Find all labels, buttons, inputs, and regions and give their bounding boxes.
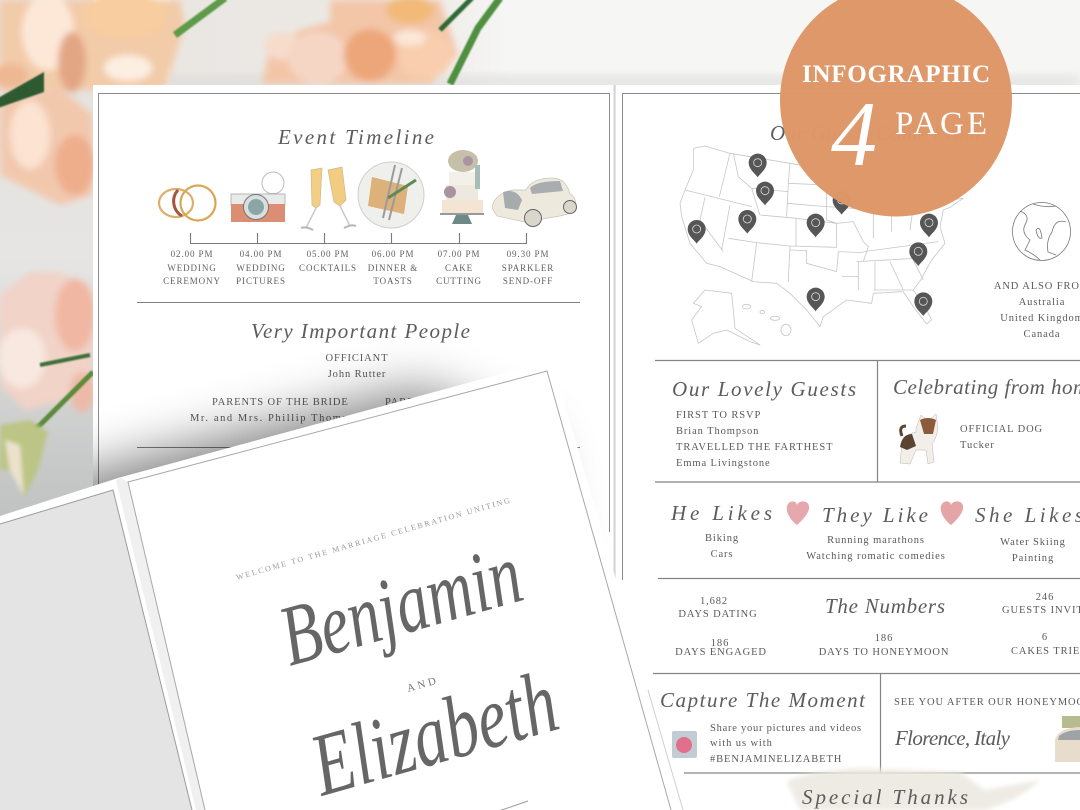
timeline labels: DINNER & — [368, 263, 418, 273]
name: Benjamin: Benjamin — [269, 526, 532, 685]
officiant text: John Rutter — [328, 369, 386, 380]
timeline labels: WEDDING — [236, 263, 286, 273]
card inner border — [128, 371, 671, 810]
heading: Very Important People: Very Important People — [251, 319, 470, 343]
text: welcome line: WELCOME TO THE MARRIAGE CELEBRATION UNITING — [235, 496, 511, 582]
panel: capture the moment — [660, 688, 866, 765]
timeline labels: SEND-OFF — [503, 276, 553, 286]
timeline labels: COCKTAILS — [299, 263, 357, 273]
location pins — [688, 154, 938, 316]
timeline labels: CUTTING — [436, 276, 482, 286]
spine fold — [116, 478, 205, 810]
map of the United States — [680, 146, 963, 345]
timeline labels: 05.00 PM — [307, 249, 349, 259]
parents of the bride text: PARENTS OF THE BRIDE — [212, 397, 349, 408]
statistics: 6 — [1042, 632, 1048, 643]
timeline axis — [190, 233, 526, 244]
text: and also from: Australia — [1019, 297, 1065, 308]
left inner panel — [0, 490, 192, 810]
panel: special thanks — [787, 768, 1040, 810]
text: share instructions: with us with — [710, 738, 773, 749]
timeline labels: TOASTS — [373, 276, 413, 286]
icon: globe — [1012, 202, 1070, 260]
heading: Florence Italy: Florence, Italy — [894, 726, 1011, 750]
panel: likes — [670, 501, 1080, 564]
icon: wedding rings — [159, 186, 216, 220]
she likes: She Likes — [975, 503, 1080, 527]
card paper — [0, 360, 683, 810]
icon: wedding cake — [440, 150, 484, 224]
statistics: DAYS ENGAGED — [675, 647, 767, 658]
heading: The Numbers: The Numbers — [825, 594, 945, 618]
photo: peach flowers and green stems — [0, 0, 500, 498]
timeline labels: 09.30 PM — [507, 249, 549, 259]
text: share instructions — [710, 723, 862, 765]
parents of the groom text: PARENTS OF THE GROOM — [385, 397, 529, 408]
statistics: 186 — [711, 638, 729, 649]
text: and also from: Canada — [1024, 329, 1060, 340]
guest facts text: Brian Thompson — [676, 426, 759, 437]
they like: Watching romatic comedies — [806, 551, 946, 562]
heading: Special Thanks: Special Thanks — [802, 785, 968, 809]
panel: our lovely guests — [672, 377, 856, 469]
he likes: Biking — [705, 533, 739, 544]
he likes: Cars — [711, 549, 733, 560]
timeline labels: SPARKLER — [502, 263, 554, 273]
icon: dinner plate — [358, 162, 424, 228]
icon: beetle car — [1055, 716, 1080, 762]
she likes: Painting — [1012, 553, 1054, 564]
panel: very important people — [137, 302, 580, 448]
card outer edge — [648, 690, 683, 810]
icon: heart right — [941, 501, 963, 525]
she likes — [975, 503, 1080, 564]
icon: camera — [231, 172, 285, 222]
left inside page — [93, 85, 614, 810]
timeline labels: WEDDING — [167, 263, 217, 273]
badge: infographic 4 page — [780, 0, 1012, 216]
guest facts text: Emma Livingstone — [676, 458, 771, 469]
heading: our guests map: Our Guests Came From — [770, 121, 980, 145]
officiant text — [326, 353, 388, 380]
icon: champagne flutes — [301, 167, 356, 230]
panel: honeymoon — [894, 697, 1080, 762]
text: official dog: OFFICIAL DOG — [960, 424, 1043, 435]
right inside page — [614, 85, 1080, 810]
left panel border — [0, 490, 192, 810]
badge numeral: 4: 4 — [831, 83, 877, 185]
they like: Running marathons — [827, 535, 925, 546]
guest facts text: FIRST TO RSVP — [676, 410, 761, 421]
he likes — [670, 501, 772, 560]
timeline labels: 06.00 PM — [372, 249, 414, 259]
badge text: infographic: INFOGRAPHIC — [802, 61, 990, 88]
he likes: He Likes — [670, 501, 772, 525]
shadow cast by front card — [93, 356, 488, 486]
icon: small camera — [672, 731, 697, 758]
timeline labels — [163, 249, 554, 286]
watercolor background — [787, 768, 1040, 810]
decorative rule — [490, 801, 528, 810]
text: official dog: Tucker — [960, 440, 995, 451]
statistics: 246 — [1036, 592, 1054, 603]
timeline labels: CEREMONY — [163, 276, 221, 286]
icon: vintage car — [492, 178, 576, 226]
panel: the numbers — [675, 592, 1080, 658]
statistics: 1,682 — [700, 596, 728, 607]
guest facts text — [676, 410, 833, 469]
statistics: 186 — [875, 633, 893, 644]
statistics — [675, 592, 1080, 658]
statistics: DAYS TO HONEYMOON — [819, 647, 949, 658]
panel: guest map — [680, 121, 1080, 345]
heading: Event Timeline: Event Timeline — [277, 125, 434, 149]
icon: heart left — [787, 501, 809, 525]
icon: dog — [900, 414, 938, 464]
panel: celebrating from home — [893, 375, 1080, 464]
heading: Our Lovely Guests: Our Lovely Guests — [672, 377, 856, 401]
she likes: Water Skiing — [1000, 537, 1066, 548]
timeline labels: 02.00 PM — [171, 249, 213, 259]
front folded card — [0, 360, 683, 810]
panel: event timeline — [159, 125, 576, 286]
parents of the bride text: Mr. and Mrs. Phillip Thompson — [190, 413, 368, 424]
text: official dog — [960, 424, 1043, 451]
timeline labels: CAKE — [445, 263, 473, 273]
they like — [806, 503, 946, 562]
text: share instructions: Share your pictures and videos — [710, 723, 862, 734]
text: share instructions: #BENJAMINELIZABETH — [710, 754, 842, 765]
panel dividers — [653, 360, 1080, 773]
they like: They Like — [822, 503, 928, 527]
statistics: DAYS DATING — [678, 609, 758, 620]
text: and: AND — [406, 674, 440, 695]
guest facts text: TRAVELLED THE FARTHEST — [676, 442, 833, 453]
badge text: page: PAGE — [895, 106, 987, 142]
officiant text: OFFICIANT — [326, 353, 388, 364]
parents of the bride text — [190, 397, 368, 424]
heading: Capture The Moment: Capture The Moment — [660, 688, 866, 712]
timeline labels: 07.00 PM — [438, 249, 480, 259]
text: and also from — [994, 281, 1080, 340]
timeline labels: 04.00 PM — [240, 249, 282, 259]
name: Elizabeth: Elizabeth — [300, 651, 568, 810]
timeline labels: PICTURES — [236, 276, 286, 286]
